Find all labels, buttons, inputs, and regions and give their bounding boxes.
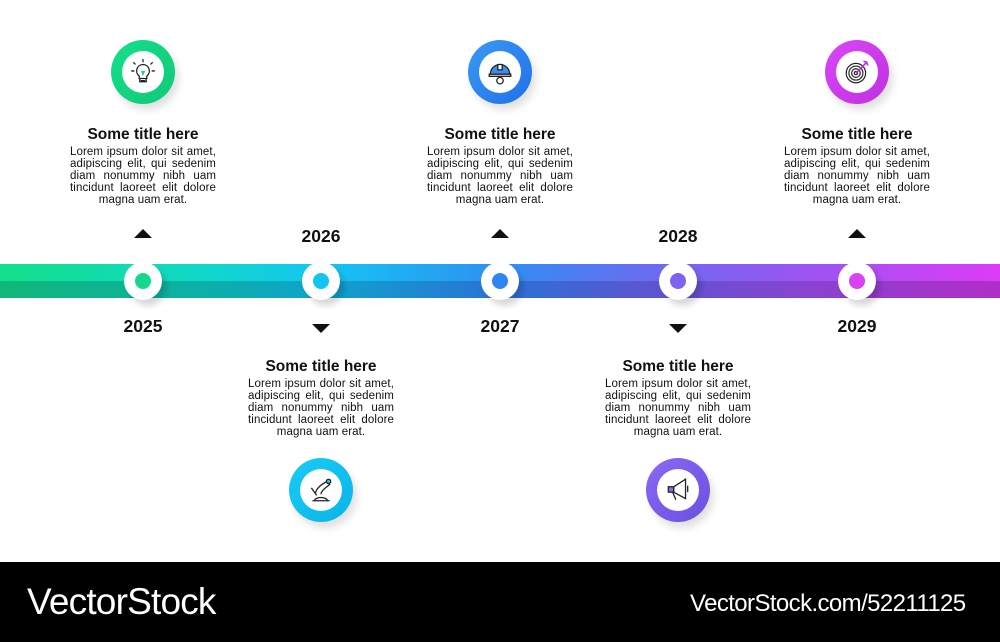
text 2026: Lorem ipsum dolor sit amet, adipiscing elit, qui sedenim diam nonummy nibh uam tincidunt laoreet elit dolore magna uam erat.: [248, 378, 394, 438]
text 2025: Some title here: [87, 126, 199, 143]
arrow up 2029: [848, 229, 866, 238]
year 2026: 2026: [302, 226, 340, 246]
year 2028: 2028: [659, 226, 697, 246]
arrow down 2026: [312, 324, 330, 333]
text 2027: Some title here: [444, 126, 556, 143]
footer: [0, 562, 1000, 642]
text 2028: Some title here: [622, 358, 734, 375]
year 2025: 2025: [124, 316, 162, 336]
icon: lightbulb 2025: [111, 40, 175, 104]
text 2026: Some title here: [265, 358, 377, 375]
icon: megaphone 2028: [646, 458, 710, 522]
text 2029: Lorem ipsum dolor sit amet, adipiscing elit, qui sedenim diam nonummy nibh uam tincidunt laoreet elit dolore magna uam erat.: [784, 146, 930, 206]
node 2029: [838, 262, 876, 300]
node 2028: [659, 262, 697, 300]
text 2025: Lorem ipsum dolor sit amet, adipiscing elit, qui sedenim diam nonummy nibh uam tincidunt laoreet elit dolore magna uam erat.: [70, 146, 216, 206]
text 2027: Lorem ipsum dolor sit amet, adipiscing elit, qui sedenim diam nonummy nibh uam tincidunt laoreet elit dolore magna uam erat.: [427, 146, 573, 206]
arrow up 2025: [134, 229, 152, 238]
text 2028: Lorem ipsum dolor sit amet, adipiscing elit, qui sedenim diam nonummy nibh uam tincidunt laoreet elit dolore magna uam erat.: [605, 378, 751, 438]
year 2029: 2029: [838, 316, 876, 336]
year 2027: 2027: [481, 316, 519, 336]
icon: microscope 2026: [289, 458, 353, 522]
node 2026: [302, 262, 340, 300]
timeline bar: [0, 264, 1000, 298]
text 2029: Some title here: [801, 126, 913, 143]
node 2027: [481, 262, 519, 300]
node 2025: [124, 262, 162, 300]
icon: helmet 2027: [468, 40, 532, 104]
icon: target 2029: [825, 40, 889, 104]
footer logo: VectorStock: [27, 581, 216, 622]
arrow down 2028: [669, 324, 687, 333]
footer url: VectorStock.com/52211125: [690, 590, 966, 617]
arrow up 2027: [491, 229, 509, 238]
